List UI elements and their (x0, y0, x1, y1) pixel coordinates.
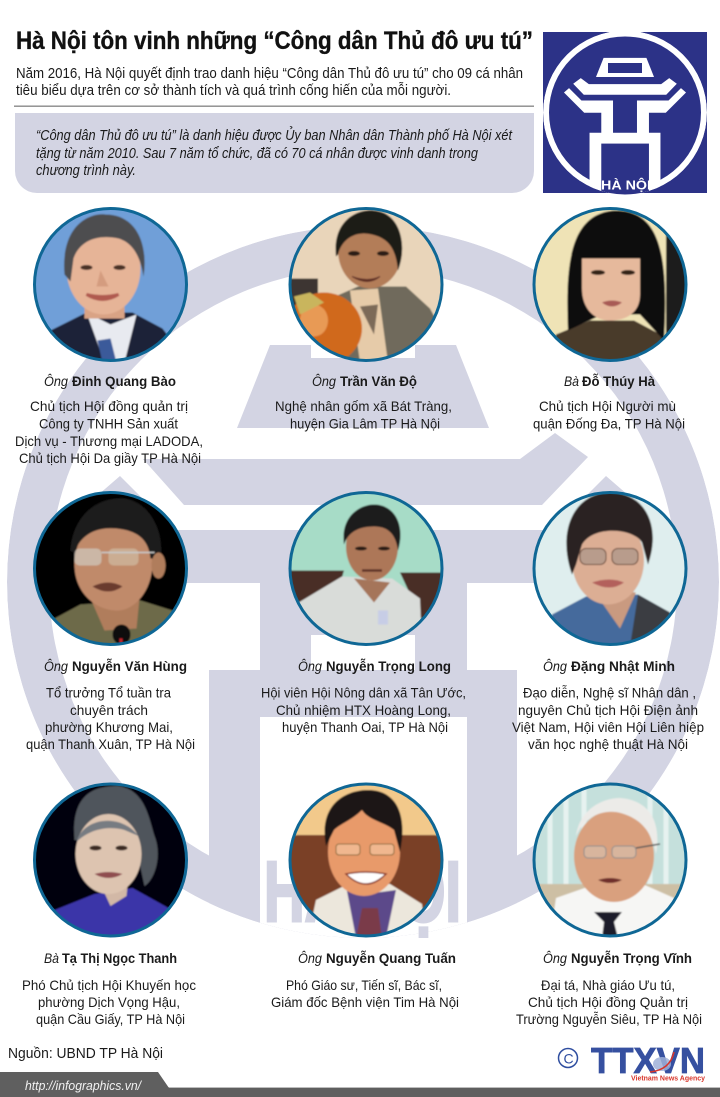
logo: TTXVN: Vietnam News Agency (631, 1074, 706, 1082)
person: Nguyễn Văn Hùng: quận Thanh Xuân, TP Hà Nội (26, 736, 195, 752)
title: Hà Nội tôn vinh những “Công dân Thủ đô ưu tú” (16, 27, 533, 55)
person: Nguyễn Trọng Vĩnh: Chủ tịch Hội đồng Quản trị (528, 994, 688, 1010)
intro text (16, 65, 523, 99)
person: Nguyễn Quang Tuấn: Nguyễn Quang Tuấn (326, 950, 456, 966)
person: Nguyễn Trọng Long: Hội viên Hội Nông dân xã Tân Ước, (261, 684, 466, 700)
person: Nguyễn Trọng Long (261, 658, 466, 735)
watermark: Hanoi emblem background: HÀ NỘI (264, 844, 461, 940)
person: Đỗ Thúy Hà: Đỗ Thúy Hà (582, 373, 655, 389)
person: Nguyễn Trọng Vĩnh: Nguyễn Trọng Vĩnh (571, 950, 692, 966)
person: Đặng Nhật Minh: Đạo diễn, Nghệ sĩ Nhân dân , (523, 684, 696, 700)
person: Nguyễn Văn Hùng: phường Khương Mai, (45, 719, 173, 735)
footer band: http://infographics.vn/ (25, 1078, 142, 1093)
person: Nguyễn Văn Hùng: Tổ trưởng Tổ tuần tra (46, 684, 171, 700)
person: Trần Văn Độ: huyện Gia Lâm TP Hà Nội (290, 416, 440, 432)
person: Đặng Nhật Minh: văn học nghệ thuật Hà Nội (528, 736, 688, 752)
person: Nguyễn Trọng Vĩnh: Ông (543, 950, 567, 966)
panel: definition callout (15, 113, 534, 193)
person: Nguyễn Quang Tuấn (271, 950, 459, 1010)
person: Nguyễn Quang Tuấn: Giám đốc Bệnh viện Tim Hà Nội (271, 994, 459, 1010)
portrait: Trần Văn Độ (286, 204, 446, 364)
source note: Nguồn: UBND TP Hà Nội (8, 1045, 163, 1062)
panel: definition callout: “Công dân Thủ đô ưu tú” là danh hiệu được Ủy ban Nhân dân Thành phố Hà Nội xét (36, 126, 513, 144)
person: Nguyễn Trọng Long: huyện Thanh Oai, TP Hà Nội (282, 719, 448, 735)
watermark: Hanoi emblem background (7, 226, 719, 962)
person: Đinh Quang Bào: Công ty TNHH Sản xuất (39, 416, 178, 432)
person: Đặng Nhật Minh: Ông (543, 658, 567, 674)
portrait: Tạ Thị Ngọc Thanh (30, 780, 190, 940)
person: Tạ Thị Ngọc Thanh: Bà (44, 950, 59, 966)
person: Nguyễn Trọng Long: Nguyễn Trọng Long (326, 658, 451, 674)
person: Đặng Nhật Minh (512, 658, 704, 752)
person: Trần Văn Độ: Nghệ nhân gốm xã Bát Tràng, (275, 398, 452, 414)
person: Đinh Quang Bào: Đinh Quang Bào (72, 373, 176, 389)
person: Tạ Thị Ngọc Thanh (22, 950, 196, 1027)
person: Nguyễn Trọng Vĩnh (516, 950, 702, 1027)
logo: TTXVN: TTXVN (591, 1040, 705, 1081)
person: Đặng Nhật Minh: Việt Nam, Hội viên Hội Liên hiệp (512, 719, 704, 735)
intro text: Năm 2016, Hà Nội quyết định trao danh hiệu “Công dân Thủ đô ưu tú” cho 09 cá nhân (16, 65, 523, 82)
intro text: tiêu biểu dựa trên cơ sở thành tích và quá trình cống hiến của mỗi người. (16, 82, 451, 99)
person: Nguyễn Trọng Long: Chủ nhiệm HTX Hoàng Long, (276, 702, 451, 718)
person: Nguyễn Trọng Vĩnh: Trường Nguyễn Siêu, TP Hà Nội (516, 1011, 702, 1027)
person: Nguyễn Trọng Long: Ông (298, 658, 322, 674)
person: Đặng Nhật Minh: nguyên Chủ tịch Hội Điện ảnh (518, 702, 698, 718)
person: Trần Văn Độ: Trần Văn Độ (340, 373, 417, 389)
portrait: Đặng Nhật Minh (530, 488, 690, 648)
person: Nguyễn Trọng Vĩnh: Đại tá, Nhà giáo Ưu tú, (541, 977, 675, 993)
portrait: Nguyễn Văn Hùng (30, 488, 190, 648)
footer band (0, 1072, 720, 1097)
person: Đinh Quang Bào: Dịch vụ - Thương mại LADODA, (15, 433, 203, 449)
person: Nguyễn Quang Tuấn: Phó Giáo sư, Tiến sĩ, Bác sĩ, (286, 977, 442, 993)
person: Nguyễn Quang Tuấn: Ông (298, 950, 322, 966)
person: Nguyễn Văn Hùng: chuyên trách (70, 702, 148, 718)
portrait: Đỗ Thúy Hà (530, 204, 692, 364)
person: Đỗ Thúy Hà (533, 373, 685, 432)
person: Đinh Quang Bào: Ông (44, 373, 68, 389)
person: Tạ Thị Ngọc Thanh: Tạ Thị Ngọc Thanh (62, 950, 177, 966)
person: Tạ Thị Ngọc Thanh: Phó Chủ tịch Hội Khuyến học (22, 977, 196, 993)
icon: Hanoi logo: HÀ NỘI (601, 178, 651, 192)
panel: definition callout: chương trình này. (36, 163, 136, 179)
person: Đỗ Thúy Hà: Chủ tịch Hội Người mù (539, 398, 676, 414)
portrait: Nguyễn Quang Tuấn (286, 780, 446, 940)
person: Đặng Nhật Minh: Đặng Nhật Minh (571, 658, 675, 674)
panel: definition callout: tặng từ năm 2010. Sau 7 năm tổ chức, đã có 70 cá nhân được vinh danh trong (36, 146, 478, 162)
person: Đinh Quang Bào (15, 373, 203, 466)
portrait: Đinh Quang Bào (30, 204, 190, 364)
person: Nguyễn Văn Hùng (26, 658, 195, 752)
portrait: Nguyễn Trọng Vĩnh (530, 780, 690, 940)
person: Nguyễn Văn Hùng: Nguyễn Văn Hùng (72, 658, 187, 674)
person: Tạ Thị Ngọc Thanh: quận Cầu Giấy, TP Hà Nội (36, 1011, 185, 1027)
person: Đinh Quang Bào: Chủ tịch Hội Da giầy TP Hà Nội (19, 450, 201, 466)
person: Đinh Quang Bào: Chủ tịch Hội đồng quản trị (30, 398, 188, 414)
person: Trần Văn Độ: Ông (312, 373, 336, 389)
icon: copyright: C (564, 1050, 574, 1066)
person: Đỗ Thúy Hà: Bà (564, 373, 579, 389)
icon: copyright (558, 1048, 578, 1068)
person: Trần Văn Độ (275, 373, 452, 432)
icon: Hanoi logo (543, 30, 707, 200)
person: Đỗ Thúy Hà: quận Đống Đa, TP Hà Nội (533, 416, 685, 432)
portrait: Nguyễn Trọng Long (286, 488, 446, 648)
person: Tạ Thị Ngọc Thanh: phường Dịch Vọng Hậu, (38, 994, 180, 1010)
person: Nguyễn Văn Hùng: Ông (44, 658, 68, 674)
